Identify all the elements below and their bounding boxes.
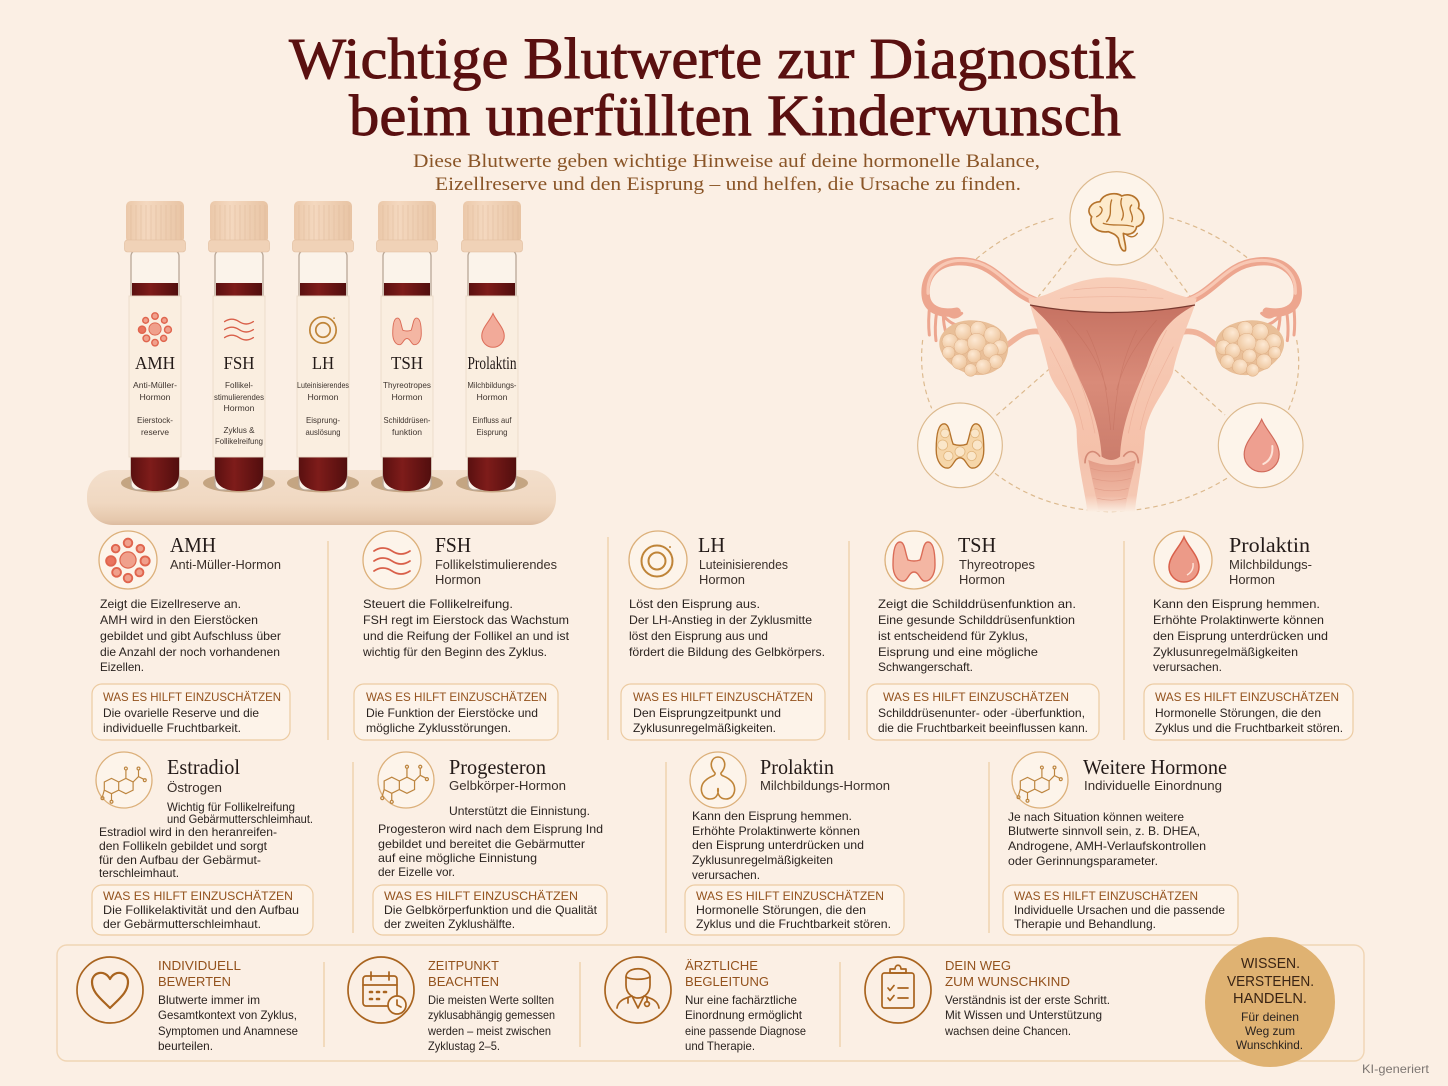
panel: AMH: die Anzahl der noch vorhandenen <box>100 645 280 659</box>
title: beim unerfüllten Kinderwunsch <box>349 83 1121 148</box>
tip: individuell bewerten: beurteilen. <box>158 1039 213 1053</box>
panel: Progesteron: Gelbkörper-Hormon <box>449 779 566 793</box>
callout: Prolaktin second row: Zyklus und die Fruchtbarkeit stören. <box>696 917 891 931</box>
panel: Prolaktin: Kann den Eisprung hemmen. <box>1153 597 1320 611</box>
tip: individuell bewerten: Blutwerte immer im <box>158 993 260 1007</box>
tip: aerztliche begleitung <box>605 957 806 1053</box>
panel: Progesteron <box>373 752 607 935</box>
callout: TSH: die die Fruchtbarkeit beeinflussen kann. <box>878 721 1088 735</box>
panel: Prolaktin second row: Kann den Eisprung hemmen. <box>692 809 852 823</box>
panel: Weitere Hormone: Blutwerte sinnvoll sein, z. B. DHEA, <box>1008 824 1200 838</box>
panel: Prolaktin: Erhöhte Prolaktinwerte können <box>1153 613 1324 627</box>
callout: Estradiol: WAS ES HILFT EINZUSCHÄTZEN <box>103 889 293 903</box>
panel: Prolaktin: Milchbildungs- <box>1229 558 1312 572</box>
callout: LH <box>621 684 825 740</box>
tip: aerztliche begleitung: und Therapie. <box>685 1039 755 1053</box>
panel: TSH: Eisprung und eine mögliche <box>878 645 1038 659</box>
tip: individuell bewerten: Gesamtkontext von Zyklus, <box>158 1008 297 1022</box>
panel: TSH: TSH <box>958 533 996 557</box>
panel: Prolaktin second row: Erhöhte Prolaktinwerte können <box>692 824 860 838</box>
icon: clipboard <box>865 957 931 1023</box>
callout: AMH <box>92 684 290 740</box>
tube: LH: Hormon <box>308 392 339 402</box>
panel: Progesteron: Progesteron <box>449 755 546 779</box>
panel: TSH: Zeigt die Schilddrüsenfunktion an. <box>878 597 1076 611</box>
panel: Progesteron: Unterstützt die Einnistung. <box>449 804 590 818</box>
panel: Prolaktin second row <box>685 752 904 935</box>
tip: zeitpunkt beachten: ZEITPUNKT <box>428 958 499 973</box>
callout: Prolaktin second row: Hormonelle Störungen, die den <box>696 903 866 917</box>
tube: AMH: AMH <box>135 353 175 373</box>
tube: TSH: TSH <box>391 353 423 373</box>
icon: Estradiol molecule <box>96 752 152 808</box>
icon: AMH <box>99 531 157 589</box>
tip: dein weg: Verständnis ist der erste Schritt. <box>945 993 1110 1007</box>
callout: Weitere Hormone: Individuelle Ursachen und die passende <box>1014 903 1225 917</box>
callout: FSH <box>354 684 558 740</box>
panel: LH: fördert die Bildung des Gelbkörpers. <box>629 645 825 659</box>
callout: FSH: mögliche Zyklusstörungen. <box>366 721 511 735</box>
icon: TSH <box>885 531 943 589</box>
panel: Weitere Hormone <box>1003 752 1238 935</box>
tip: dein weg: DEIN WEG <box>945 958 1011 973</box>
badge: Wissen Verstehen Handeln <box>1205 937 1335 1067</box>
panel: LH: Löst den Eisprung aus. <box>629 597 760 611</box>
badge: Wissen Verstehen Handeln: VERSTEHEN. <box>1227 973 1314 990</box>
panel: AMH: Eizellen. <box>100 660 144 674</box>
panel: FSH: Hormon <box>435 573 481 587</box>
tip: aerztliche begleitung: ÄRZTLICHE <box>685 958 758 973</box>
tip: aerztliche begleitung: Einordnung ermöglicht <box>685 1008 803 1022</box>
callout: FSH: Die Funktion der Eierstöcke und <box>366 706 538 720</box>
panel: LH: Der LH-Anstieg in der Zyklusmitte <box>629 613 812 627</box>
tip: individuell bewerten <box>77 957 298 1053</box>
badge: Wissen Verstehen Handeln: Wunschkind. <box>1236 1038 1303 1052</box>
panel: Prolaktin: verursachen. <box>1153 660 1222 674</box>
tube: TSH: funktion <box>392 427 422 437</box>
callout: Progesteron: WAS ES HILFT EINZUSCHÄTZEN <box>384 889 578 903</box>
panel: Estradiol: den Follikeln gebildet und sorgt <box>99 839 268 853</box>
title: Wichtige Blutwerte zur Diagnostik <box>289 26 1135 91</box>
panel: Prolaktin: Hormon <box>1229 573 1275 587</box>
panel: Prolaktin second row: den Eisprung unterdrücken und <box>692 838 864 852</box>
panel: Weitere Hormone: Androgene, AMH-Verlaufskontrollen <box>1008 839 1206 853</box>
tube: AMH: Hormon <box>140 392 171 402</box>
tip: aerztliche begleitung: Nur eine fachärztliche <box>685 993 797 1007</box>
tube: AMH: Anti-Müller- <box>133 380 177 390</box>
tube: TSH: Hormon <box>392 392 423 402</box>
callout: Prolaktin: Zyklus und die Fruchtbarkeit stören. <box>1155 721 1343 735</box>
title <box>289 26 1135 148</box>
panel: Estradiol: Wichtig für Follikelreifung <box>167 800 295 814</box>
callout: AMH: individuelle Fruchtbarkeit. <box>103 721 241 735</box>
panel: Weitere Hormone: oder Gerinnungsparameter. <box>1008 854 1158 868</box>
tube: FSH: Hormon <box>224 403 255 413</box>
callout: Prolaktin second row: WAS ES HILFT EINZUSCHÄTZEN <box>696 889 884 903</box>
panel: Progesteron: gebildet und bereitet die Gebärmutter <box>378 837 585 851</box>
subtitle <box>413 151 1040 195</box>
tube: LH: Luteinisierendes <box>297 380 349 390</box>
icon: Weitere Hormone molecule <box>1012 752 1068 808</box>
icon: Progesteron molecule <box>378 752 434 808</box>
callout: TSH: Schilddrüsenunter- oder -überfunktion, <box>878 706 1085 720</box>
panel: Estradiol: für den Aufbau der Gebärmut- <box>99 853 261 867</box>
badge: Wissen Verstehen Handeln: Weg zum <box>1245 1024 1295 1038</box>
panel: FSH <box>354 531 570 740</box>
panel: Prolaktin second row: Zyklusunregelmäßigkeiten <box>692 853 833 867</box>
AI-generated note: KI-generiert <box>1362 1062 1430 1076</box>
tip: dein weg: Mit Wissen und Unterstützung <box>945 1008 1102 1022</box>
tip: individuell bewerten: BEWERTEN <box>158 974 231 989</box>
panel: LH: LH <box>698 533 725 557</box>
panel: LH: löst den Eisprung aus und <box>629 629 768 643</box>
tube: Prolaktin: Hormon <box>476 392 508 402</box>
tip: zeitpunkt beachten: Die meisten Werte sollten <box>428 993 554 1007</box>
panel: LH: Hormon <box>699 573 745 587</box>
callout: TSH: WAS ES HILFT EINZUSCHÄTZEN <box>883 690 1069 704</box>
tip: individuell bewerten: INDIVIDUELL <box>158 958 241 973</box>
tube: TSH <box>376 201 438 491</box>
callout: AMH: WAS ES HILFT EINZUSCHÄTZEN <box>103 690 281 704</box>
panel: TSH: Hormon <box>959 573 1005 587</box>
tube: LH <box>292 201 354 491</box>
callout: AMH: Die ovarielle Reserve und die <box>103 706 259 720</box>
panel: FSH: und die Reifung der Follikel an und ist <box>363 629 570 643</box>
panel: AMH <box>92 531 290 740</box>
callout: Progesteron <box>373 885 607 935</box>
tube: AMH: Eierstock- <box>137 415 173 425</box>
panel: Progesteron: auf eine mögliche Einnistung <box>378 851 537 865</box>
callout: Prolaktin: WAS ES HILFT EINZUSCHÄTZEN <box>1155 690 1339 704</box>
panel: Progesteron: Progesteron wird nach dem Eisprung Ind <box>378 822 603 836</box>
tube: LH: Eisprung- <box>306 415 340 425</box>
icon: FSH <box>363 531 421 589</box>
icon: brain circle <box>1070 172 1163 265</box>
tip: dein weg: wachsen deine Chancen. <box>944 1024 1071 1038</box>
tip: individuell bewerten: Symptomen und Anamnese <box>158 1024 298 1038</box>
tube: Prolaktin: Einfluss auf <box>472 415 512 425</box>
blood tube rack illustration <box>87 201 556 525</box>
icon: doctor <box>605 957 671 1023</box>
tube: TSH: Thyreotropes <box>383 380 431 390</box>
panel: AMH: AMH wird in den Eierstöcken <box>100 613 258 627</box>
column dividers <box>324 537 1124 1047</box>
panel: Prolaktin: den Eisprung unterdrücken und <box>1153 629 1328 643</box>
left ligament and tube <box>926 260 1047 376</box>
icon: drop circle <box>1218 403 1303 488</box>
panel: Weitere Hormone: Je nach Situation können weitere <box>1008 810 1184 824</box>
subtitle: Eizellreserve und den Eisprung – und helfen, die Ursache zu finden. <box>435 174 1021 195</box>
tip: dein weg: ZUM WUNSCHKIND <box>945 974 1070 989</box>
tip: zeitpunkt beachten: Zyklustag 2–5. <box>428 1039 500 1053</box>
tube: FSH: Zyklus & <box>224 425 255 435</box>
panel: LH: Luteinisierendes <box>699 558 788 572</box>
panel: FSH: Follikelstimulierendes <box>435 558 557 572</box>
panel: Prolaktin: Zyklusunregelmäßigkeiten <box>1153 645 1298 659</box>
callout: FSH: WAS ES HILFT EINZUSCHÄTZEN <box>366 690 547 704</box>
tip: dein weg <box>865 957 1110 1038</box>
panel: AMH: gebildet und gibt Aufschluss über <box>100 629 281 643</box>
panel: TSH: ist entscheidend für Zyklus, <box>878 629 1028 643</box>
panel: bottom tips <box>57 945 1364 1061</box>
tube: AMH <box>124 201 186 491</box>
callout: Weitere Hormone <box>1003 885 1238 935</box>
panel: AMH: AMH <box>170 533 216 557</box>
panel: Estradiol: Estradiol wird in den heranreifen- <box>99 825 277 839</box>
callout: Prolaktin second row <box>685 885 904 935</box>
tip: aerztliche begleitung: BEGLEITUNG <box>685 974 769 989</box>
callout: TSH <box>867 684 1099 740</box>
subtitle: Diese Blutwerte geben wichtige Hinweise auf deine hormonelle Balance, <box>413 151 1040 172</box>
callout: LH: Zyklusunregelmäßigkeiten. <box>633 721 776 735</box>
panel: Estradiol <box>92 752 313 935</box>
panel: FSH: wichtig für den Beginn des Zyklus. <box>362 645 547 659</box>
panel: Prolaktin second row: Prolaktin <box>760 755 834 779</box>
tube: Prolaktin: Milchbildungs- <box>468 380 517 390</box>
callout: Prolaktin: Hormonelle Störungen, die den <box>1155 706 1321 720</box>
panel: Estradiol: Östrogen <box>167 781 222 795</box>
uterus body <box>1028 277 1197 512</box>
tube: Prolaktin: Eisprung <box>476 427 508 437</box>
callout: LH: WAS ES HILFT EINZUSCHÄTZEN <box>633 690 813 704</box>
panel: Weitere Hormone: Weitere Hormone <box>1083 755 1227 779</box>
badge: Wissen Verstehen Handeln: Für deinen <box>1241 1010 1299 1024</box>
anatomy illustration: uterus with hormone circles <box>918 172 1303 512</box>
callout: Estradiol: Die Follikelaktivität und den Aufbau <box>103 903 299 917</box>
panel: FSH: FSH <box>435 533 471 557</box>
icon: Prolaktin drop <box>1154 531 1212 589</box>
callout: Weitere Hormone: Therapie und Behandlung. <box>1014 917 1156 931</box>
tube: AMH: reserve <box>141 427 169 437</box>
panel: AMH: Anti-Müller-Hormon <box>170 558 281 572</box>
tube: TSH: Schilddrüsen- <box>384 415 431 425</box>
panel: Prolaktin <box>1144 531 1353 740</box>
callout: Estradiol: der Gebärmutterschleimhaut. <box>103 917 261 931</box>
panel: TSH: Thyreotropes <box>959 558 1035 572</box>
icon: heart <box>77 957 143 1023</box>
callout: Estradiol <box>92 885 313 935</box>
callout: Progesteron: der zweiten Zyklushälfte. <box>384 917 515 931</box>
tube: FSH: Follikelreifung <box>215 436 263 446</box>
badge: Wissen Verstehen Handeln: HANDELN. <box>1233 990 1307 1007</box>
panel: LH <box>621 531 825 740</box>
icon: trefoil outline <box>690 752 746 808</box>
badge: Wissen Verstehen Handeln: WISSEN. <box>1241 955 1300 972</box>
tip: zeitpunkt beachten: zyklusabhängig gemessen <box>428 1008 555 1022</box>
panel: FSH: Steuert die Follikelreifung. <box>363 597 513 611</box>
tube: FSH <box>208 201 270 491</box>
callout: Prolaktin <box>1144 684 1353 740</box>
right ligament and tube <box>1177 260 1298 376</box>
panel: Prolaktin second row: Milchbildungs-Hormon <box>760 779 890 793</box>
panel: Progesteron: der Eizelle vor. <box>378 865 455 879</box>
icon: thyroid circle <box>918 403 1002 488</box>
callout: LH: Den Eisprungzeitpunkt und <box>633 706 781 720</box>
icon: LH <box>629 531 687 589</box>
tube: LH: LH <box>312 353 334 373</box>
panel: TSH: Eine gesunde Schilddrüsenfunktion <box>878 613 1075 627</box>
tip: zeitpunkt beachten: BEACHTEN <box>428 974 499 989</box>
panel: FSH: FSH regt im Eierstock das Wachstum <box>363 613 569 627</box>
tube: FSH: stimulierendes <box>214 392 264 402</box>
tube: FSH: Follikel- <box>225 380 253 390</box>
tip: zeitpunkt beachten: werden – meist zwischen <box>427 1024 551 1038</box>
panel: Estradiol: Estradiol <box>167 755 240 779</box>
panel: TSH <box>867 531 1099 740</box>
tip: zeitpunkt beachten <box>348 957 555 1053</box>
panel: TSH: Schwangerschaft. <box>878 660 973 674</box>
icon: calendar <box>348 957 414 1023</box>
tip: aerztliche begleitung: eine passende Diagnose <box>685 1024 806 1038</box>
panel: AMH: Zeigt die Eizellreserve an. <box>100 597 241 611</box>
panel: Estradiol: terschleimhaut. <box>99 866 179 880</box>
tube: FSH: FSH <box>224 353 254 373</box>
callout: Weitere Hormone: WAS ES HILFT EINZUSCHÄTZEN <box>1014 889 1198 903</box>
panel: Prolaktin: Prolaktin <box>1229 533 1311 557</box>
panel: Estradiol: und Gebärmutterschleimhaut. <box>167 812 313 826</box>
panel: Weitere Hormone: Individuelle Einordnung <box>1084 779 1222 793</box>
callout: Progesteron: Die Gelbkörperfunktion und die Qualität <box>384 903 598 917</box>
tube: Prolaktin: Prolaktin <box>468 353 516 373</box>
tube: LH: auslösung <box>306 427 341 437</box>
panel: Prolaktin second row: verursachen. <box>692 868 760 882</box>
tube: Prolaktin <box>462 201 522 491</box>
